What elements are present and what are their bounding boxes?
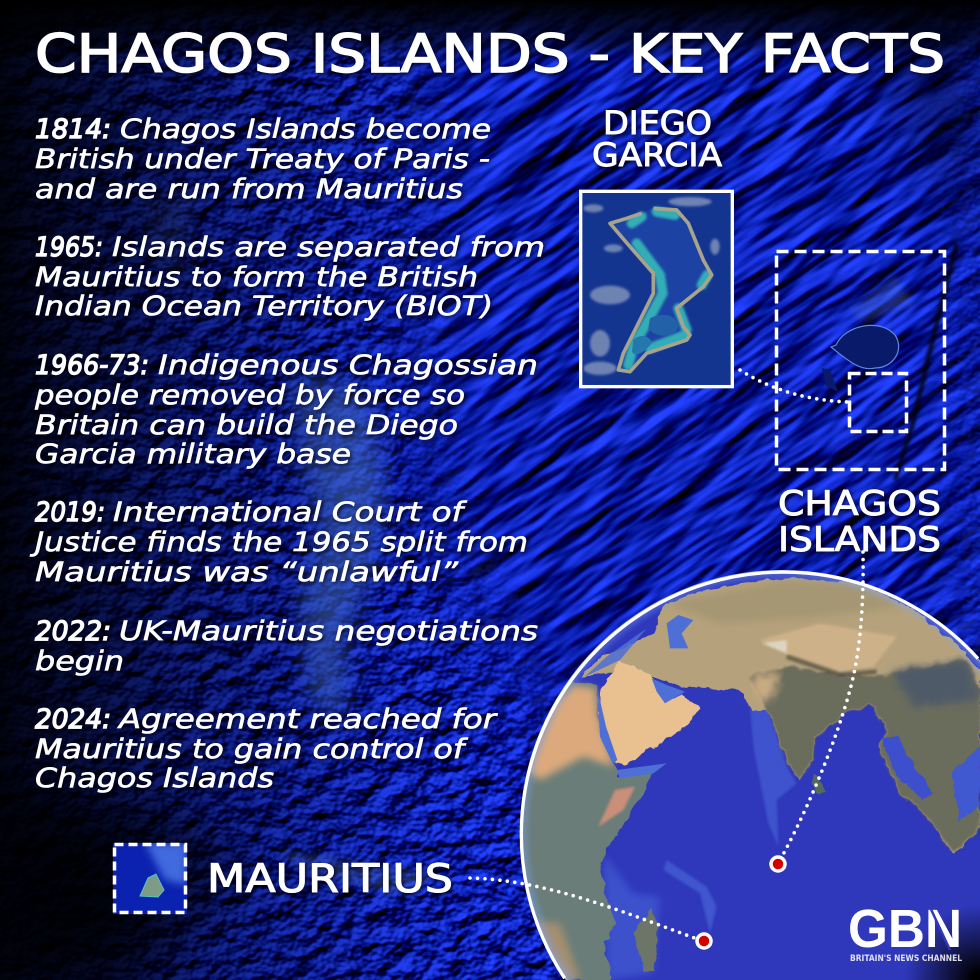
label: Diego Garcia: GARCIA bbox=[592, 136, 722, 174]
fact 1814: and are run from Mauritius bbox=[35, 174, 463, 205]
marker: Mauritius bbox=[697, 934, 711, 948]
map box: Chagos Islands bbox=[776, 252, 944, 470]
land: Saharan sand bbox=[527, 685, 613, 780]
land: Tibet and Himalaya bbox=[760, 623, 897, 672]
atoll land rim bbox=[610, 208, 712, 372]
sea: Andaman bbox=[882, 737, 933, 800]
fact 1965: Islands are separated from bbox=[112, 232, 545, 263]
fact 1966-73: Britain can build the Diego bbox=[35, 410, 458, 441]
fact 2022: UK-Mauritius negotiations bbox=[119, 616, 538, 647]
fact 2024: 2024: bbox=[35, 704, 111, 735]
dotted connector: Chagos Islands bbox=[779, 552, 863, 862]
plateau glow bbox=[290, 375, 385, 720]
fact 2024: Agreement reached for bbox=[117, 704, 498, 735]
dotted connector: Mauritius bbox=[470, 878, 703, 941]
fact 1966-73 bbox=[34, 350, 538, 470]
fact 2024: Mauritius to gain control of bbox=[35, 734, 468, 765]
title: CHAGOS ISLANDS - KEY FACTS bbox=[35, 24, 945, 85]
fact 1965: Mauritius to form the British bbox=[35, 262, 478, 293]
map box: Diego Garcia locator bbox=[850, 374, 906, 432]
ocean bbox=[520, 560, 980, 980]
fact 1966-73: Garcia military base bbox=[35, 439, 351, 470]
logo: GB News: BRITAIN'S NEWS CHANNEL bbox=[850, 954, 963, 964]
fact 2019 bbox=[29, 497, 528, 588]
fact 1965 bbox=[35, 232, 545, 322]
atmosphere rim bbox=[520, 560, 980, 980]
fact 1966-73: 1966-73: bbox=[35, 350, 149, 381]
land: Indian subcontinent and SE Asia shading bbox=[750, 660, 980, 853]
fact 2019: Justice finds the 1965 split from bbox=[29, 527, 528, 558]
fact 2019: Mauritius was “unlawful” bbox=[35, 557, 459, 588]
land: Madagascar bbox=[633, 907, 658, 973]
land: Sri Lanka bbox=[813, 773, 825, 793]
inset: Diego Garcia atoll photo bbox=[581, 191, 732, 387]
land: Arabia bbox=[600, 660, 700, 763]
fact 2024 bbox=[35, 704, 498, 794]
fact 2019: 2019: bbox=[35, 497, 105, 528]
fact 1966-73: Indigenous Chagossian bbox=[158, 350, 538, 381]
sea: South China bbox=[950, 747, 980, 820]
dotted connector: Diego Garcia bbox=[740, 370, 847, 402]
fact 1965: Indian Ocean Territory (BIOT) bbox=[35, 291, 493, 322]
marker: Chagos Islands bbox=[771, 857, 785, 871]
fact 2022: 2022: bbox=[35, 616, 111, 647]
fact 1814 bbox=[35, 114, 491, 205]
label: Diego Garcia: DIEGO bbox=[603, 104, 712, 142]
fact 1966-73: people removed by force so bbox=[34, 380, 465, 411]
label: Diego Garcia bbox=[592, 104, 722, 174]
globe outline bbox=[521, 572, 978, 978]
land: Eurasia bbox=[580, 578, 980, 855]
label: Chagos Islands: CHAGOS bbox=[778, 484, 941, 524]
fact 1814: British under Treaty of Paris - bbox=[35, 144, 490, 175]
map box: Mauritius bbox=[113, 843, 187, 914]
label: Chagos Islands: ISLANDS bbox=[778, 520, 941, 560]
timeline facts text bbox=[29, 114, 545, 794]
label: Chagos Islands bbox=[778, 484, 941, 560]
atoll teal shallows bbox=[628, 212, 707, 365]
fact 1814: 1814: bbox=[35, 114, 111, 145]
seamount lagoon bbox=[831, 325, 899, 369]
bottom right vignette bbox=[880, 880, 980, 980]
label: Mauritius: MAURITIUS bbox=[207, 857, 453, 902]
globe bbox=[520, 560, 980, 980]
clouds bbox=[583, 197, 720, 375]
fact 1814: Chagos Islands become bbox=[120, 114, 491, 145]
fact 2024: Chagos Islands bbox=[35, 763, 274, 794]
fact 2019: International Court of bbox=[113, 497, 467, 528]
atoll lagoon bbox=[610, 208, 712, 372]
seas bbox=[667, 615, 693, 648]
fact 1965: 1965: bbox=[35, 232, 103, 263]
logo: GB News: GBN bbox=[848, 899, 962, 959]
fact 2022 bbox=[35, 616, 538, 677]
fact 2022: begin bbox=[35, 646, 124, 677]
land: Africa bbox=[520, 682, 653, 980]
